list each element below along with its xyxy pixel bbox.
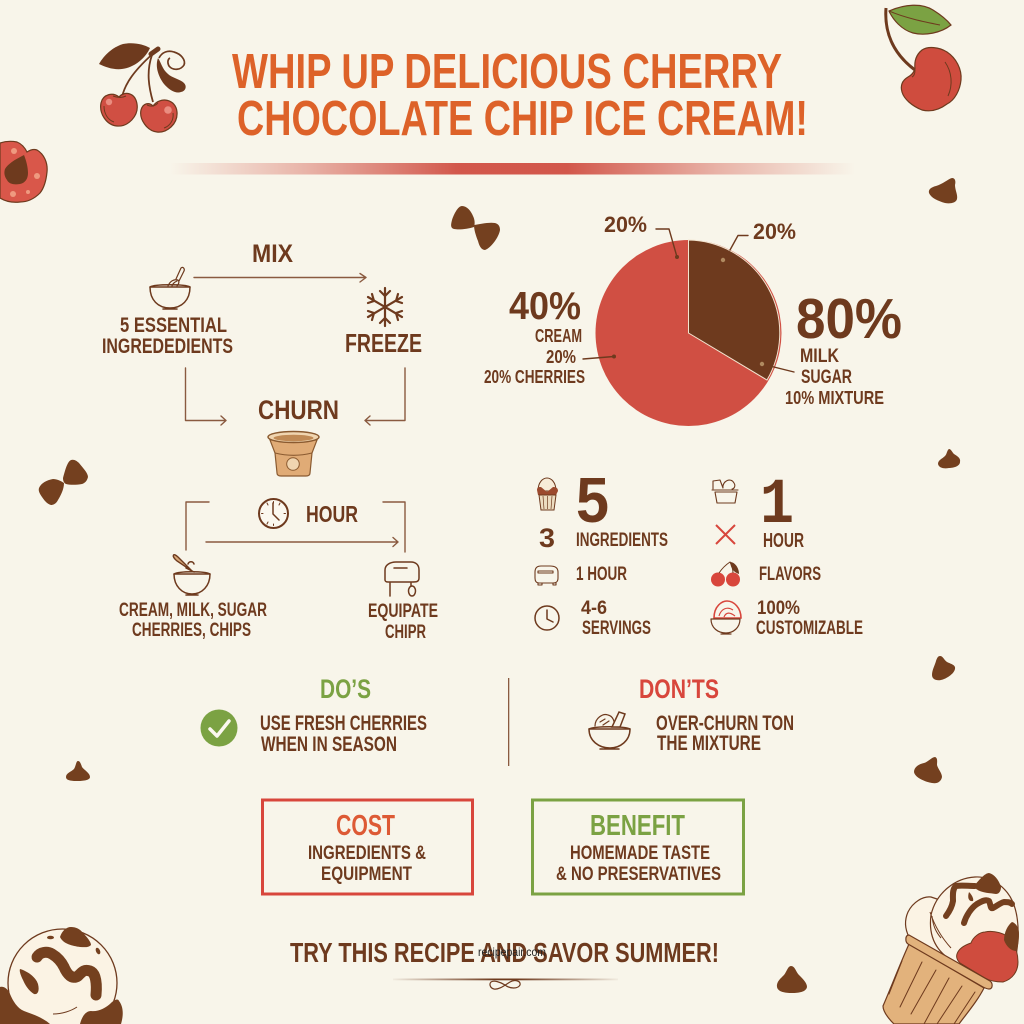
step: equipment — [368, 601, 438, 643]
label: top left 20%: 20% — [604, 212, 647, 237]
stat: customizable — [756, 598, 863, 639]
stat: customizable: 100% — [757, 598, 800, 619]
icon: cherry with green leaf top right — [886, 5, 961, 111]
panel: don'ts — [589, 674, 794, 755]
panel: cost — [262, 800, 472, 894]
don'ts text — [656, 712, 794, 755]
flow diagram — [102, 240, 438, 643]
leader lines — [583, 229, 794, 372]
label: 40% cream and cherries: 20% CHERRIES — [484, 367, 585, 387]
icon: bowl with spoon — [173, 555, 210, 595]
icon: clock outline — [535, 606, 559, 630]
stat: servings: 4-6 — [581, 598, 607, 619]
icon: bowl of toppings — [712, 480, 738, 503]
stat: 3: 3 — [539, 523, 555, 553]
heading: cost: COST — [336, 810, 395, 842]
heading: do's: DO’S — [320, 674, 371, 704]
label: 80% milk and sugar: SUGAR — [801, 367, 852, 388]
cost text — [308, 843, 426, 885]
step: equipment: EQUIPATE — [368, 601, 438, 622]
cherry scoop — [957, 931, 1018, 982]
do's text: USE FRESH CHERRIES — [260, 712, 427, 735]
icon: ice cream tub — [268, 432, 319, 476]
label: 40% cream and cherries: CREAM — [535, 326, 582, 346]
pie chart — [484, 212, 902, 426]
step: ingredient list: CREAM, MILK, SUGAR — [119, 600, 267, 621]
benefit text: HOMEMADE TASTE — [570, 843, 710, 864]
slice: brown — [688, 240, 780, 380]
benefit text — [556, 843, 721, 885]
call to action: TRY THIS RECIPE AND SAVOR SUMMER! — [290, 937, 719, 968]
icon: green check — [200, 710, 238, 746]
stat: 5 ingredients: INGREDIENTS — [576, 530, 668, 551]
icon: cupcake — [537, 478, 558, 510]
stat: servings — [581, 598, 651, 639]
illustration: ice cream cone bottom right — [883, 873, 1019, 1024]
title: WHIP UP DELICIOUS CHERRY — [232, 45, 782, 99]
don'ts text: OVER-CHURN TON — [656, 712, 794, 735]
icon: snowflake — [368, 288, 402, 326]
arrow: freeze to churn — [365, 368, 405, 425]
stat: 5 ingredients: 5 — [576, 464, 609, 536]
label: 80% milk and sugar: 80% — [796, 287, 902, 351]
step: essential ingredients: 5 ESSENTIAL — [120, 314, 227, 337]
benefit text: & NO PRESERVATIVES — [556, 864, 721, 885]
label: 40% cream and cherries: 40% — [509, 285, 581, 328]
label: 40% cream and cherries — [484, 285, 585, 387]
main scoop — [930, 877, 1018, 965]
arrow: bracket left — [186, 502, 209, 550]
step: hour: HOUR — [306, 501, 358, 527]
heading: benefit: BENEFIT — [590, 810, 685, 842]
stat: 1 hour: 1 HOUR — [576, 564, 627, 585]
icon: bowl with whisk — [150, 267, 190, 309]
arrow: bracket right — [383, 502, 405, 552]
label: 40% cream and cherries: 20% — [546, 347, 576, 367]
heading: don'ts: DON’TS — [639, 674, 719, 704]
divider — [508, 678, 509, 766]
step: ingredient list — [119, 600, 267, 641]
icon: clock — [259, 499, 288, 528]
cost text: INGREDIENTS & — [308, 843, 426, 864]
step: essential ingredients — [102, 314, 233, 358]
chocolate chip bow left — [39, 460, 88, 505]
label: 80% milk and sugar: 10% MIXTURE — [785, 388, 884, 408]
slice: red — [596, 240, 782, 426]
stat: 1 hour: HOUR — [763, 530, 804, 552]
label: 80% milk and sugar: MILK — [800, 346, 839, 367]
icon: red cross — [716, 525, 735, 544]
stat: flavors: FLAVORS — [759, 564, 821, 585]
chocolate chips scattered — [66, 178, 960, 993]
do's text: WHEN IN SEASON — [261, 733, 397, 756]
icon: toaster — [535, 566, 558, 585]
footer ornament — [393, 978, 618, 989]
step: churn: CHURN — [258, 395, 339, 425]
cone lines — [889, 961, 975, 1024]
label: 80% milk and sugar — [785, 287, 902, 408]
watermark: recipepair.com — [478, 945, 546, 959]
cone body — [883, 944, 984, 1024]
title: CHOCOLATE CHIP ICE CREAM! — [237, 92, 808, 146]
panel: benefit — [532, 800, 744, 894]
icon: cherry half with pit — [0, 141, 47, 202]
title — [232, 45, 808, 146]
panel: do's — [200, 674, 427, 756]
arrow: ingredients to churn — [186, 368, 226, 425]
icon: small cherries — [711, 562, 740, 586]
icon: bowl with pestle — [589, 712, 630, 749]
step: freeze: FREEZE — [345, 328, 422, 358]
step: mix label: MIX — [252, 240, 293, 268]
chocolate chip bow upper — [451, 206, 500, 250]
back scoop — [905, 897, 950, 960]
do's text — [260, 712, 427, 756]
label: top right 20%: 20% — [753, 219, 796, 244]
stat: 1 hour: 1 — [760, 470, 794, 542]
chocolate drizzle — [946, 886, 1012, 923]
icon: cherries with leaf and swirl — [99, 43, 186, 132]
don'ts text: THE MIXTURE — [657, 732, 761, 755]
stat: customizable: CUSTOMIZABLE — [756, 618, 863, 639]
title divider bar — [170, 163, 855, 174]
step: equipment: CHIPR — [385, 622, 426, 643]
arrow: mix to freeze — [194, 274, 366, 282]
icon: bowl of ice cream — [711, 601, 741, 634]
cost text: EQUIPMENT — [321, 864, 412, 885]
cone rim — [906, 935, 992, 989]
step: essential ingredients: INGREDEDIENTS — [102, 335, 233, 358]
stats panel — [535, 464, 863, 639]
stat: 5 ingredients — [576, 464, 668, 551]
icon: hand mixer — [385, 562, 419, 596]
stat: servings: SERVINGS — [582, 618, 651, 639]
step: ingredient list: CHERRIES, CHIPS — [132, 620, 251, 641]
arrow: ingredients to equipment — [206, 538, 398, 546]
illustration: ice cream scoop bottom left — [0, 927, 123, 1024]
